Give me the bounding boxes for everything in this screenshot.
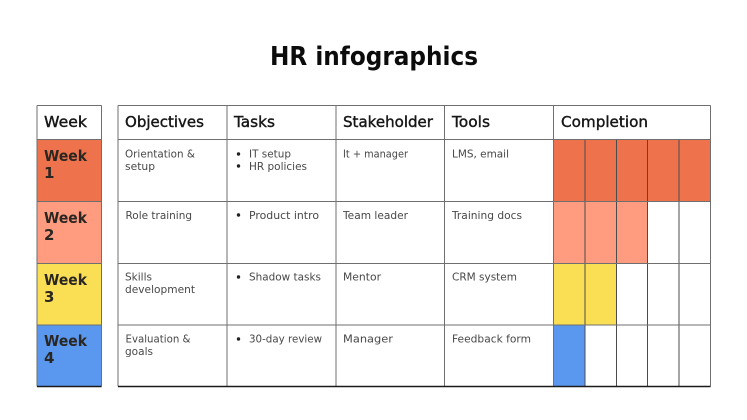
week row 4: 4: [44, 349, 54, 367]
table headers: Tasks: [233, 113, 275, 131]
table headers: Completion: [561, 113, 648, 131]
table headers: Stakeholder: [343, 113, 434, 131]
objectives text: [125, 148, 196, 358]
week row 1: [37, 140, 102, 202]
objectives text: goals: [125, 345, 153, 358]
tools text: Training docs: [451, 209, 522, 222]
week row 3: 3: [44, 288, 54, 306]
panel: week column: [37, 106, 102, 386]
tasks text: [237, 148, 322, 346]
objectives text: Role training: [126, 209, 192, 222]
week row 1: 1: [44, 164, 54, 182]
week header: Week: [44, 113, 87, 131]
table headers: Objectives: [125, 113, 204, 131]
week row 4: Week: [44, 332, 88, 350]
objectives text: Evaluation &: [126, 332, 191, 346]
completion bars: [554, 140, 710, 386]
tools text: CRM system: [452, 270, 517, 284]
tools text: LMS, email: [452, 148, 509, 160]
tasks text: Shadow tasks: [249, 270, 321, 284]
objectives text: setup: [125, 160, 155, 173]
title: HR infographics: [270, 42, 478, 72]
week row 2: Week: [44, 209, 88, 227]
objectives text: Skills: [125, 270, 152, 284]
objectives text: Orientation &: [125, 148, 195, 160]
stakeholder text: Mentor: [343, 270, 381, 284]
tasks text: 30-day review: [249, 332, 322, 346]
stakeholder text: Manager: [343, 332, 393, 346]
tasks text: HR policies: [249, 160, 307, 173]
tools text: [451, 148, 531, 346]
week row 3: Week: [44, 271, 88, 289]
tasks text: IT setup: [249, 148, 291, 160]
tools text: Feedback form: [452, 332, 531, 346]
table headers: [125, 113, 648, 131]
stakeholder text: Team leader: [342, 209, 408, 222]
panel: main table: [118, 106, 710, 386]
table grid: [118, 106, 710, 386]
week row 2: [37, 202, 102, 264]
week row 1: Week: [44, 147, 88, 165]
stakeholder text: [342, 148, 408, 346]
tasks text: Product intro: [249, 209, 319, 222]
stakeholder text: It + manager: [343, 148, 408, 160]
week row 3: [37, 264, 102, 325]
objectives text: development: [125, 283, 196, 296]
week row 2: 2: [44, 226, 54, 244]
table headers: Tools: [451, 113, 490, 131]
week row 4: [37, 325, 102, 386]
